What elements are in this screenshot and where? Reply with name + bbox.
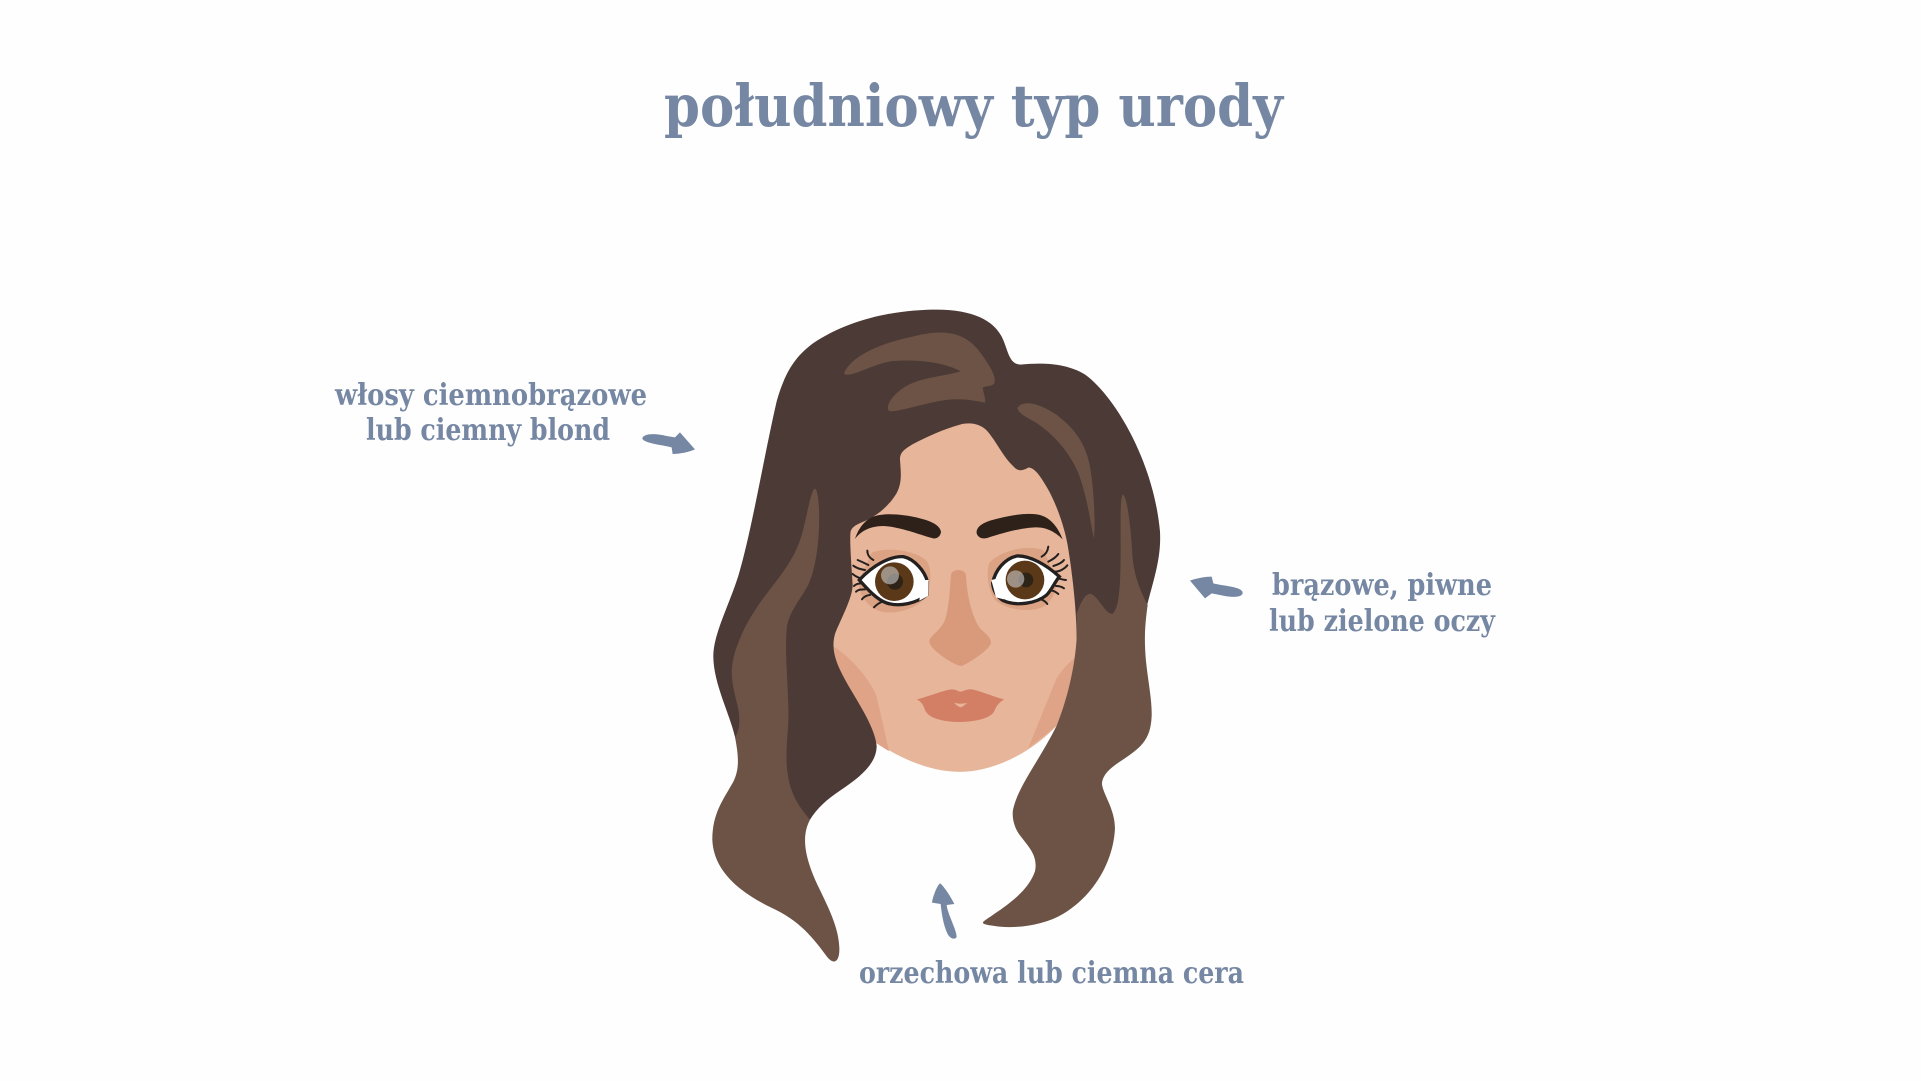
right eye [991, 547, 1067, 604]
left lashes [853, 551, 882, 607]
left eyebrow [855, 514, 941, 539]
illustration: woman's head [712, 310, 1160, 961]
left eye shadow [858, 550, 930, 613]
left iris [875, 562, 914, 601]
right lashes [1040, 547, 1067, 604]
right iris [1006, 561, 1044, 599]
title: południowy typ urody [664, 72, 1285, 140]
face [830, 406, 1078, 772]
hair and face shapes [712, 310, 1160, 961]
label: eyes: lub zielone oczy [1269, 604, 1496, 639]
right eye shadow [988, 548, 1057, 610]
label: eyes [1269, 568, 1496, 639]
hair highlight crown [844, 333, 995, 411]
arrow: hair [642, 432, 695, 454]
right pupil [1019, 573, 1033, 587]
arrow: eyes [1190, 577, 1243, 598]
jaw shadow right [1028, 656, 1077, 748]
left eye [853, 551, 929, 607]
lip highlight [954, 703, 967, 707]
left inner corner [919, 580, 929, 601]
lips [917, 689, 1004, 722]
label: hair [334, 378, 647, 448]
left eye white [859, 557, 927, 605]
left pupil [887, 574, 903, 590]
right eye white [993, 556, 1059, 604]
label: hair: lub ciemny blond [366, 413, 610, 448]
facial features [853, 514, 1067, 722]
right highlight [1007, 570, 1024, 588]
hair highlight right lock [983, 494, 1152, 927]
right inner corner [991, 578, 1004, 599]
label: hair: włosy ciemnobrązowe [334, 378, 647, 413]
right eyebrow [977, 514, 1063, 539]
nose [929, 570, 991, 666]
label: eyes: brązowe, piwne [1272, 568, 1492, 603]
mouth shape [917, 689, 1004, 722]
dark hair [713, 310, 1160, 820]
jaw shadow left [830, 645, 889, 751]
left highlight [881, 566, 899, 584]
hair highlight left strand [712, 489, 839, 961]
arrow: skin [932, 883, 957, 939]
hair highlight temple [1017, 403, 1095, 538]
label: skin: orzechowa lub ciemna cera [859, 956, 1244, 991]
